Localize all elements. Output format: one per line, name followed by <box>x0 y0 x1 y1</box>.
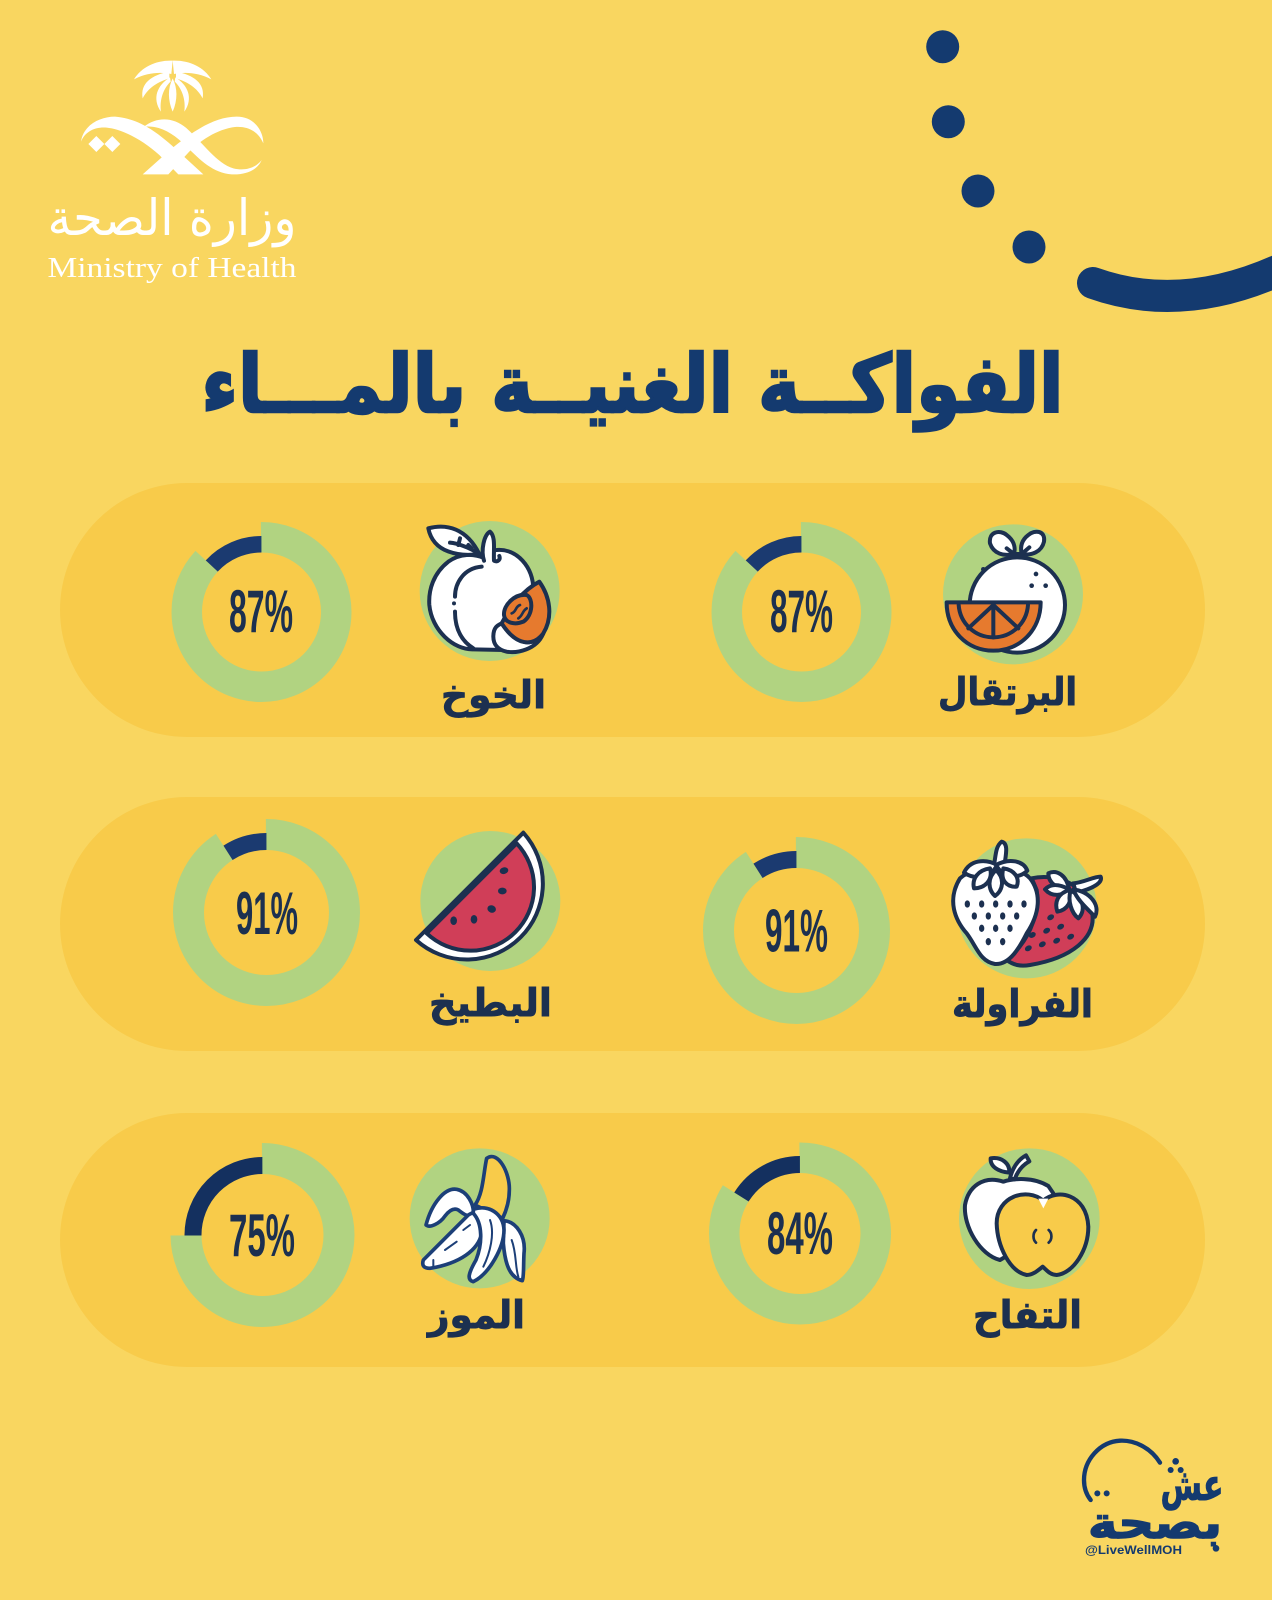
title: الفواكــة الغنيــة بالمـــاء <box>202 338 1064 432</box>
item: banana <box>186 1148 550 1337</box>
logo English name: Ministry of Health <box>48 252 297 284</box>
logo: Ministry of Health <box>48 61 297 284</box>
label: apple: التفاح <box>973 1293 1082 1337</box>
logo: Live Well <box>1084 1441 1224 1557</box>
icon: strawberry <box>953 838 1101 978</box>
donut: banana 75% <box>186 1158 339 1312</box>
logo handle: @LiveWellMOH <box>1085 1543 1182 1557</box>
donut: apple 84% <box>705 1138 895 1329</box>
item: apple <box>705 1138 1100 1337</box>
panel: row 2 strawberry and watermelon <box>60 797 1205 1051</box>
label: banana: الموز <box>426 1293 525 1337</box>
icon: logo arc and dots <box>1084 1441 1219 1552</box>
donut: orange 87% <box>706 516 897 708</box>
icon: orange <box>943 524 1083 664</box>
donut: peach 87% <box>166 516 357 708</box>
icon: watermelon <box>416 831 560 971</box>
label: watermelon: البطيخ <box>429 981 552 1025</box>
panel: row 1 orange and peach <box>60 483 1205 737</box>
icon: apple <box>959 1148 1100 1289</box>
item: peach <box>166 516 560 717</box>
donut: banana 75%: 75% <box>229 1202 295 1269</box>
logo Arabic name: وزارة الصحة <box>48 189 296 248</box>
donut: strawberry 91%: 91% <box>765 898 828 964</box>
icon: peach <box>420 521 560 661</box>
logo text: healthy: بصحة <box>1088 1498 1222 1549</box>
donut: watermelon 91% <box>169 815 364 1010</box>
donut: peach 87%: 87% <box>229 578 293 645</box>
logo text: live: عش <box>1160 1460 1224 1511</box>
panel: row 3 apple and banana <box>60 1113 1205 1367</box>
label: peach: الخوخ <box>441 673 546 717</box>
label: strawberry: الفراولة <box>952 982 1093 1027</box>
item: strawberry <box>699 833 1101 1028</box>
donut: strawberry 91% <box>699 833 894 1028</box>
icon: banana <box>410 1148 550 1288</box>
label: orange: البرتقال <box>938 670 1077 714</box>
donut: apple 84%: 84% <box>767 1200 833 1267</box>
item: orange <box>706 516 1083 714</box>
icon: palm and crossed swords emblem <box>81 61 263 174</box>
item: watermelon <box>169 815 560 1025</box>
donut: orange 87%: 87% <box>770 578 833 645</box>
donut: watermelon 91%: 91% <box>236 880 298 947</box>
decoration: dots and curved stroke <box>926 30 1272 296</box>
